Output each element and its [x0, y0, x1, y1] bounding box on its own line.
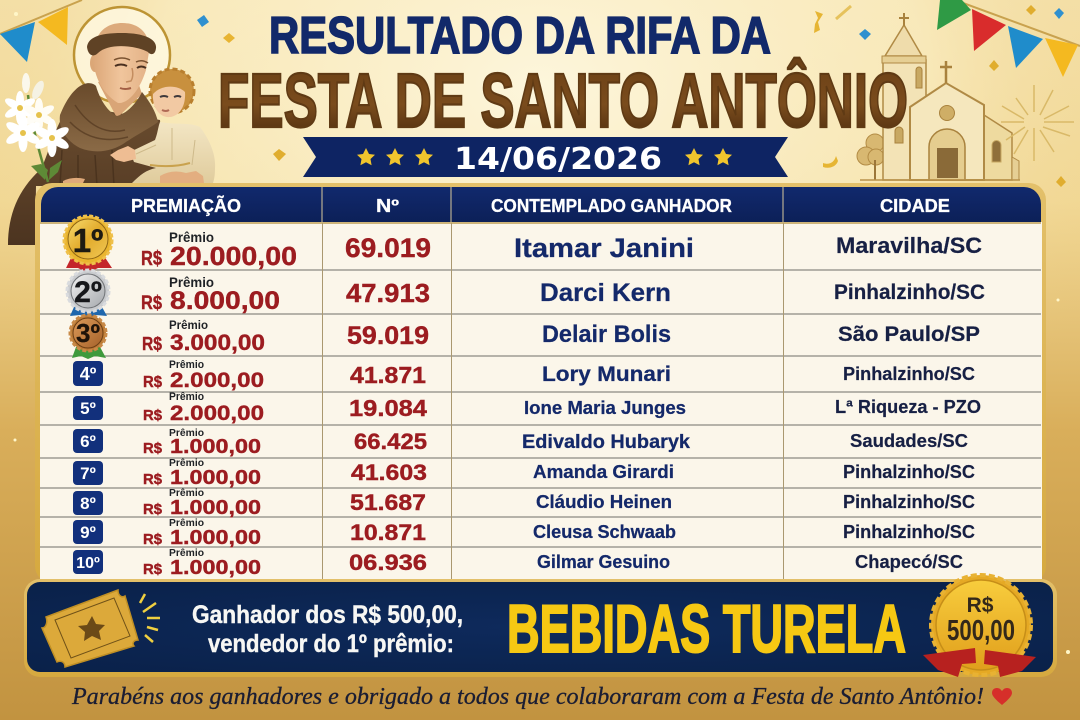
row 1: Itamar Janini — [514, 233, 694, 263]
icon: heart — [992, 688, 1012, 705]
row 9 — [73, 518, 975, 549]
medal: 3º: 3º — [76, 318, 100, 348]
row 7: R$ — [143, 471, 163, 488]
row 2: R$ — [141, 293, 162, 314]
row 5: 19.084 — [349, 395, 427, 421]
row 7 — [73, 458, 975, 489]
banner text: vendedor do 1º prêmio: — [208, 630, 454, 658]
row 6: R$ — [143, 440, 163, 457]
row 5 — [73, 391, 981, 425]
row 7: Amanda Girardi — [533, 462, 674, 482]
banner text — [192, 601, 463, 658]
table header: Nº — [376, 196, 399, 216]
row 5: R$ — [143, 407, 163, 424]
row 3: 3.000,00 — [170, 330, 265, 355]
badge: 6º — [73, 429, 103, 453]
child head — [150, 69, 194, 117]
row 7: Pinhalzinho/SC — [843, 462, 975, 482]
row 9: Prêmio — [169, 518, 204, 529]
row 10: 06.936 — [349, 550, 427, 575]
bunting: top left — [0, 0, 82, 62]
row 8: Cláudio Heinen — [536, 492, 672, 512]
medal: 3º — [70, 315, 106, 359]
row 4: Prêmio — [169, 359, 204, 371]
row 9: 1.000,00 — [170, 527, 261, 549]
badge: 10º — [73, 550, 103, 574]
side window — [992, 140, 1001, 162]
row 2: Pinhalzinho/SC — [834, 281, 985, 304]
badge: 5º — [73, 396, 103, 420]
child hand — [110, 146, 136, 162]
table header: CONTEMPLADO GANHADOR — [491, 196, 732, 216]
saint hands — [160, 171, 204, 183]
row 5: Prêmio — [169, 391, 204, 403]
footer message: Parabéns aos ganhadores e obrigado a todos que colaboraram com a Festa de Santo Antônio! — [71, 684, 984, 710]
date: 14/06/2026 — [454, 142, 662, 177]
row 4: 41.871 — [350, 362, 426, 388]
badge: 10º: 10º — [76, 555, 100, 572]
row 6: Saudades/SC — [850, 431, 968, 451]
row 9: R$ — [143, 531, 163, 548]
medal: 2º — [67, 270, 109, 318]
row 1: Maravilha/SC — [836, 233, 982, 258]
row 5: 2.000,00 — [170, 402, 264, 425]
badge: 6º: 6º — [80, 432, 96, 451]
bottom banner: R$ 500 winner — [24, 575, 1057, 677]
facade — [910, 83, 984, 180]
title line 1: RESULTADO DA RIFA DA — [269, 7, 771, 65]
badge: 9º: 9º — [80, 523, 96, 542]
row 4: Lory Munari — [542, 363, 671, 386]
row 6: Edivaldo Hubaryk — [522, 432, 690, 453]
row 10: 1.000,00 — [170, 557, 261, 579]
badge: 9º — [73, 520, 103, 544]
lilies — [3, 73, 71, 182]
row 9: Pinhalzinho/SC — [843, 522, 975, 542]
tower — [883, 60, 926, 180]
row 1: Prêmio — [169, 229, 214, 245]
halo — [74, 7, 170, 103]
icon: golden ticket — [42, 590, 160, 667]
row 5: Lª Riqueza - PZO — [835, 397, 981, 417]
gold seal: R$ 500,00: R$ — [967, 594, 994, 617]
row 7: 1.000,00 — [170, 467, 261, 489]
row 8: Prêmio — [169, 488, 204, 499]
row 7: Prêmio — [169, 458, 204, 469]
banner text: Ganhador dos R$ 500,00, — [192, 601, 463, 629]
table header: PREMIAÇÃO — [131, 195, 241, 216]
row 4: 2.000,00 — [170, 369, 264, 392]
row 8: 1.000,00 — [170, 497, 261, 519]
row 2 — [67, 270, 985, 318]
row 2: 8.000,00 — [170, 287, 280, 315]
row 3: Delair Bolis — [542, 321, 671, 348]
row 6: 66.425 — [354, 429, 427, 454]
row 10: R$ — [143, 561, 163, 578]
habit — [8, 105, 165, 245]
row 1 — [64, 216, 982, 272]
table frame — [35, 183, 1046, 583]
confetti — [197, 5, 1066, 187]
row 10: Prêmio — [169, 548, 204, 559]
neck — [98, 76, 142, 118]
row 4: Pinhalzinho/SC — [843, 364, 975, 384]
badge: 8º — [73, 491, 103, 515]
row 5: Ione Maria Junges — [524, 398, 686, 418]
row 4 — [73, 359, 975, 392]
row 2: 47.913 — [346, 278, 430, 308]
hair ring — [87, 33, 156, 55]
badge: 8º: 8º — [80, 494, 96, 513]
row 8: Pinhalzinho/SC — [843, 492, 975, 512]
row 10: Gilmar Gesuino — [537, 552, 670, 572]
row 1: R$ — [141, 248, 162, 270]
child tunic — [130, 122, 215, 183]
table header — [41, 187, 1041, 222]
badge: 7º: 7º — [80, 464, 96, 483]
badge: 5º: 5º — [80, 399, 96, 418]
row 8: 51.687 — [350, 490, 426, 515]
firework — [1001, 85, 1074, 161]
row 10: Chapecó/SC — [855, 552, 963, 572]
tree — [857, 134, 884, 165]
bunting: top right — [937, 0, 1080, 77]
row 3: 59.019 — [347, 322, 429, 350]
row 1: 69.019 — [345, 233, 431, 263]
row 9: 10.871 — [350, 520, 426, 545]
row 3 — [70, 315, 980, 359]
face — [90, 54, 100, 72]
gold seal: R$ 500,00: 500,00 — [947, 615, 1015, 647]
row 8: R$ — [143, 501, 163, 518]
row 1: 20.000,00 — [170, 241, 297, 271]
side wing — [984, 115, 1012, 180]
row 7: 41.603 — [351, 460, 427, 485]
illustration: Santo Antônio with child and lilies — [3, 7, 215, 245]
badge: 4º — [73, 361, 103, 386]
row 2: Darci Kern — [540, 279, 671, 307]
illustration: church — [857, 13, 1020, 180]
eyes, nose, mouth — [114, 58, 148, 63]
row 2: Prêmio — [169, 274, 214, 290]
badge: 7º — [73, 461, 103, 485]
cowl — [60, 83, 158, 151]
row 10 — [73, 548, 963, 579]
row 4: R$ — [143, 374, 162, 391]
date ribbon — [303, 137, 788, 177]
row 3: R$ — [142, 334, 162, 354]
table header: CIDADE — [880, 196, 950, 216]
row 6: Prêmio — [169, 428, 204, 439]
row 3: São Paulo/SP — [838, 323, 980, 346]
badge: 4º: 4º — [80, 364, 97, 384]
row 8 — [73, 488, 975, 519]
row 6 — [73, 428, 968, 458]
results table — [35, 183, 1046, 583]
row 9: Cleusa Schwaab — [533, 522, 676, 542]
title — [218, 7, 908, 144]
medal: 1º — [64, 216, 112, 272]
medal: 2º: 2º — [74, 276, 102, 309]
tonsure — [97, 23, 148, 44]
row 6: 1.000,00 — [170, 436, 261, 458]
door — [929, 129, 965, 180]
medal: 1º: 1º — [73, 222, 103, 259]
gold seal: R$ 500,00 — [923, 575, 1036, 677]
row 3: Prêmio — [169, 318, 208, 332]
